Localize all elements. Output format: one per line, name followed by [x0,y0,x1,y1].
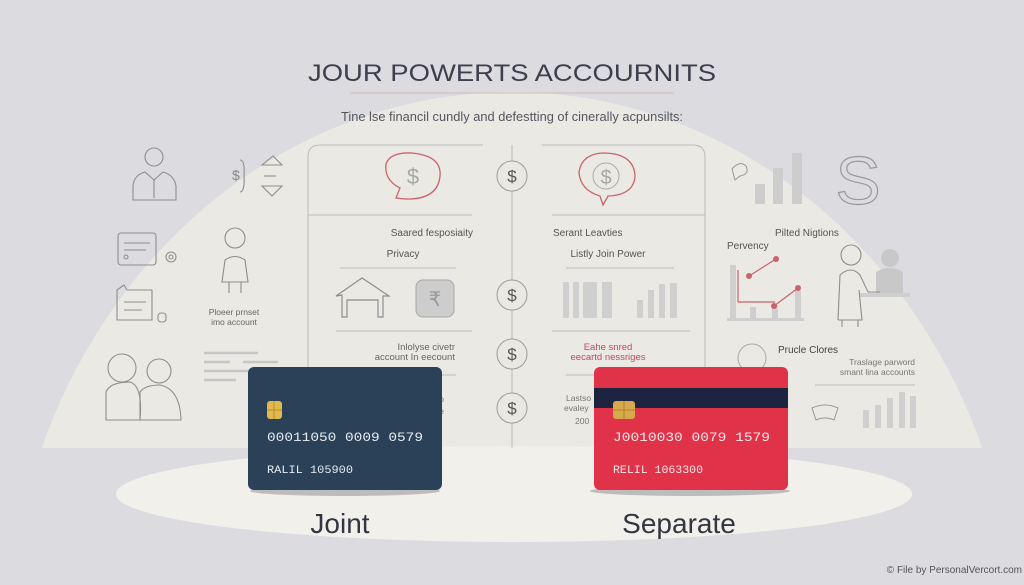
panel: comparison table: ne [435,406,444,416]
card: joint: RALIL 105900 [267,465,353,477]
panel: comparison table: $ [507,286,517,305]
icon: people at desk [838,245,910,327]
icon: bars right [563,282,677,318]
panel: comparison table: account In eecount [375,352,455,363]
panel: comparison table: Eahe snred [584,342,632,353]
icon: speech bubble dollar right: $ [600,167,612,189]
icon: bars and S [732,143,881,219]
card: separate [590,367,790,496]
panel: comparison table: Listly Join Power [570,249,646,260]
icon: speech bubble dollar right [579,153,635,205]
panel: comparison table [308,145,705,450]
text: girl caption: Ploeer prnset [209,307,260,317]
text: right rows: Serant Leavties [553,228,622,239]
panel: comparison table: $ [507,345,517,364]
panel: comparison table: $ [507,399,517,418]
panel: comparison table: Lastso [566,393,591,403]
panel: comparison table: $ [507,167,517,186]
label: joint: Joint [310,508,370,539]
panel: comparison table: Privacy [387,249,419,260]
icon: house [336,278,389,317]
icon: bars bottom right [863,392,916,428]
card: joint [248,367,442,496]
text: row 3: Inlolyse civetr [397,342,455,353]
icon: speech bubble dollar left: $ [407,164,419,189]
icon: dollar arrows [232,156,282,196]
title: JOUR POWERTS ACCOURNITS [308,60,716,87]
icon: bars and S: S [835,143,881,219]
right icons [727,143,916,428]
icon: couple [106,354,181,420]
card: separate: RELIL 1063300 [613,465,703,477]
decorative text lines [204,353,278,380]
icon: chip [267,401,282,419]
card: joint: 00011050 0009 0579 [267,430,423,445]
icon: rupee tile [416,280,454,317]
right icons: Traslage parword [849,357,915,367]
icon: card and coin [118,233,176,265]
icon: rupee tile: ₹ [429,289,441,311]
icon: dollar arrows: $ [232,167,240,183]
left icons [106,148,282,420]
right icons: Pervency [727,241,769,252]
text: Prucle Clores: Prucle Clores [778,345,838,356]
text: right labels: Pilted Nigtions [775,228,839,239]
label: separate: Separate [622,508,736,539]
stage ellipse [116,446,912,542]
panel: comparison table: evaley [564,403,589,413]
panel: comparison table: etp [432,394,444,404]
credit: © File by PersonalVercort.com [887,565,1022,576]
icon: businessman [133,148,176,200]
right icons: smant lina accounts [840,367,915,377]
card: separate: J0010030 0079 1579 [613,430,770,445]
icon: chip [613,401,635,419]
icon: dollar circles [497,161,527,423]
left icons: imo account [211,317,258,327]
icon: speech bubble dollar left [386,153,440,199]
panel: comparison table: 200 [575,416,589,426]
panel: comparison table: eecartd nessriges [571,352,646,363]
icon: chat doc [117,285,166,322]
icon: girl [222,228,248,293]
icon: line chart [727,256,804,321]
subtitle: Tine lse financil cundly and defestting of cinerally acpunsilts: [341,110,683,124]
text: left rows: Saared fesposiaity [391,228,473,239]
